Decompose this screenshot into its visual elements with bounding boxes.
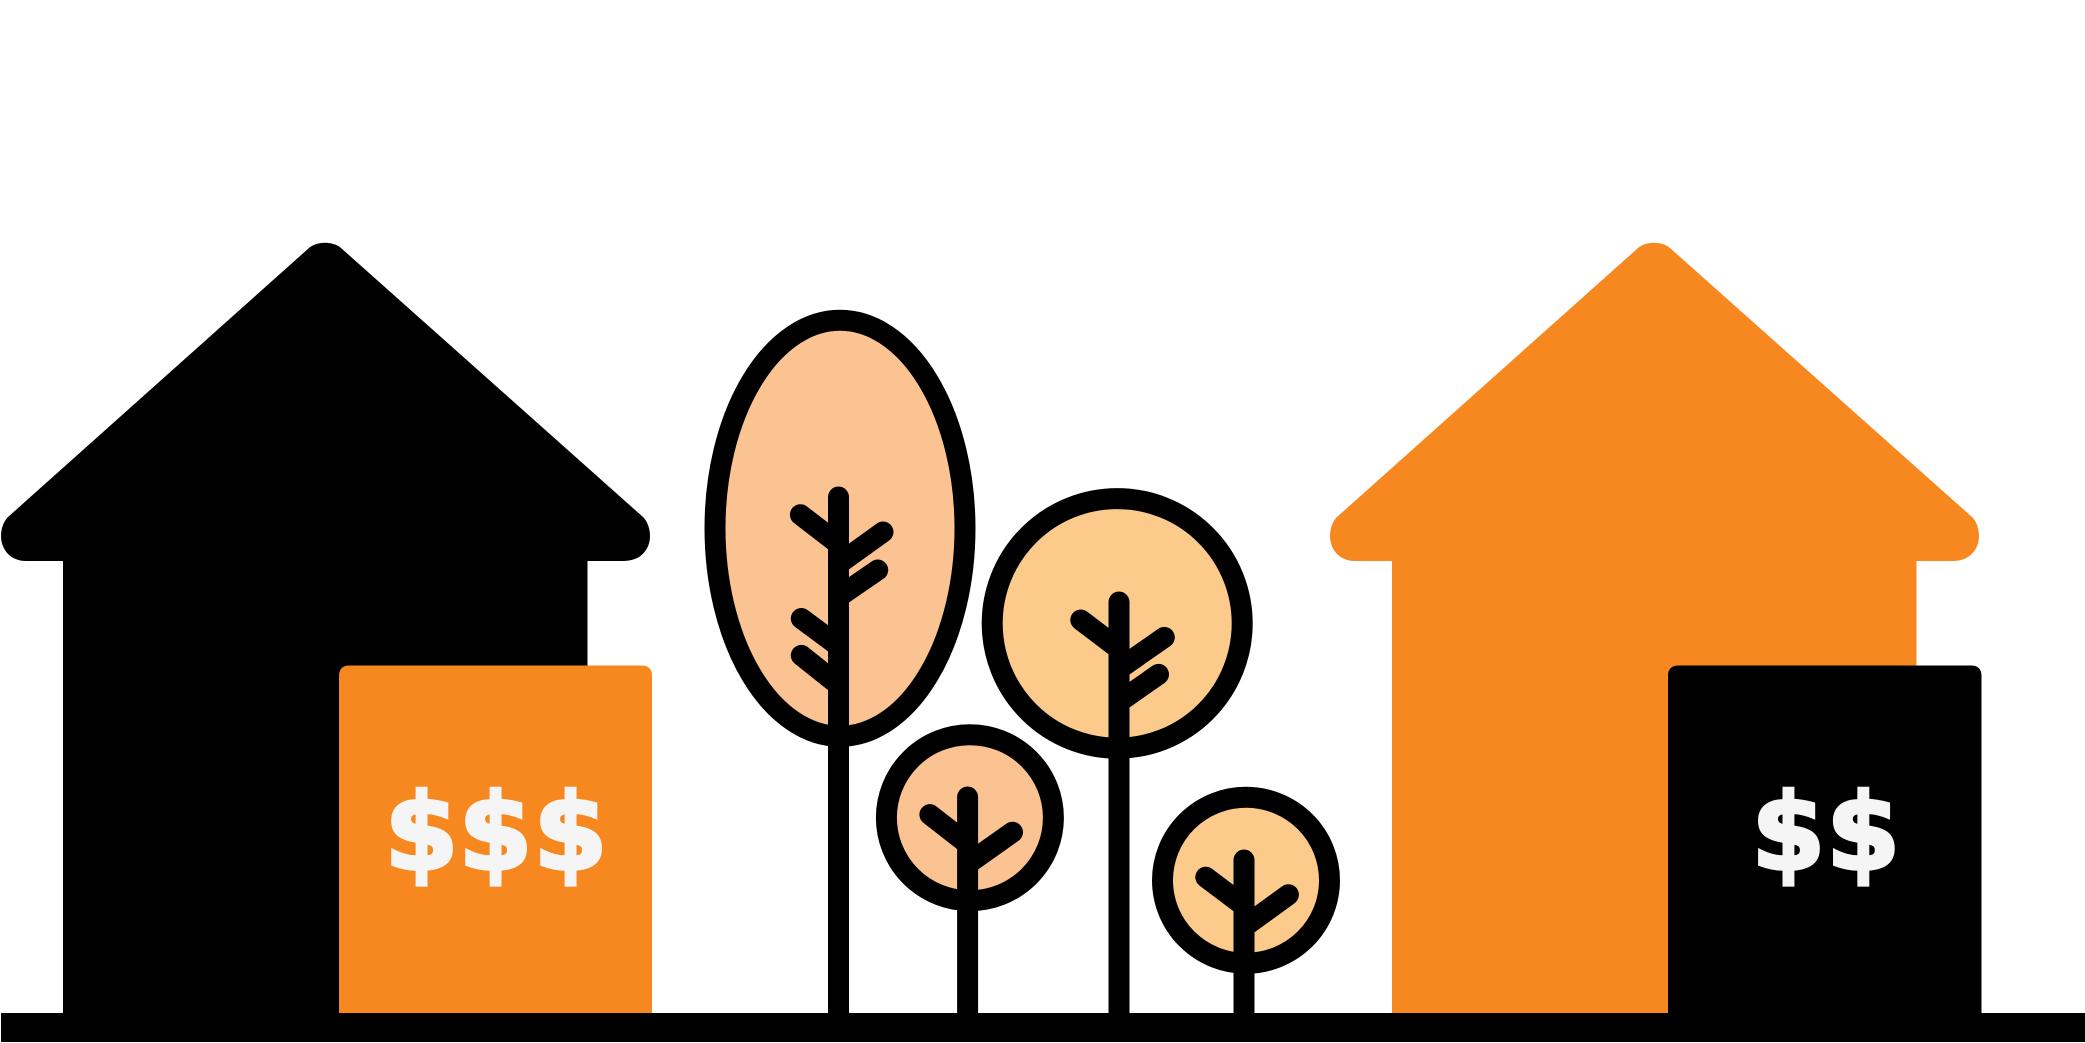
icon: small round tree right — [1162, 797, 1330, 1020]
panel: black price tag with two dollar signs — [1668, 666, 1982, 1013]
panel: orange price tag with three dollar signs — [339, 666, 652, 1013]
icon: black house — [1, 243, 650, 1042]
text: two dollar signs — [1752, 771, 1900, 894]
text: three dollar signs: $ — [459, 771, 532, 894]
text: two dollar signs: $ — [1752, 771, 1825, 894]
icon: tall oval tree — [715, 320, 965, 1020]
text: two dollar signs: $ — [1826, 771, 1900, 894]
text: three dollar signs: $ — [534, 771, 607, 894]
icon: small round tree left — [886, 735, 1053, 1020]
text: three dollar signs: $ — [385, 771, 458, 894]
icon: orange house — [1330, 243, 1979, 1042]
ground line — [1, 1013, 2085, 1042]
text: three dollar signs — [385, 771, 607, 894]
icon: large round tree — [992, 499, 1242, 1020]
